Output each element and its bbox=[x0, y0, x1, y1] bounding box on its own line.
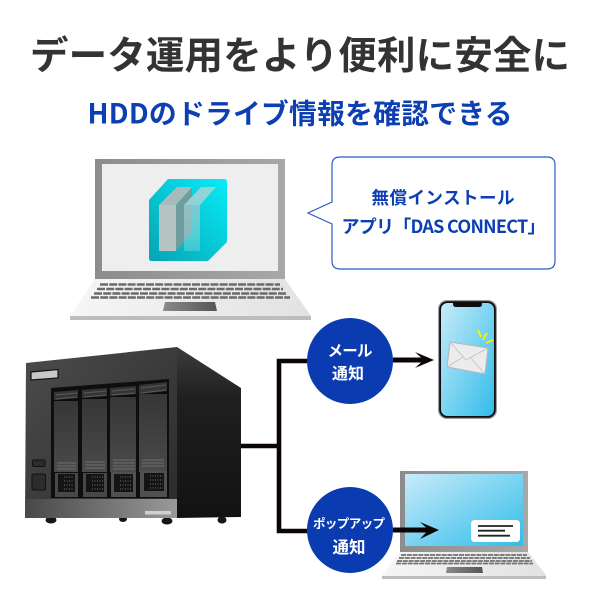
small laptop keyboard bbox=[396, 555, 533, 564]
subtitle: HDDのドライブ情報を確認できる bbox=[88, 92, 512, 132]
notification label: 通知 bbox=[332, 534, 366, 558]
arrow to phone bbox=[393, 352, 434, 368]
callout text line 1: 無償インストール bbox=[372, 185, 514, 210]
notification card bbox=[471, 520, 520, 542]
drive trays bbox=[54, 382, 167, 497]
arrow to small laptop bbox=[393, 522, 439, 539]
small laptop screen bbox=[405, 474, 523, 546]
mail label: メール bbox=[328, 339, 373, 361]
title: データ運用をより便利に安全に bbox=[30, 25, 570, 81]
NAS side panel bbox=[177, 347, 241, 518]
tray handles bbox=[56, 385, 166, 399]
NAS bottom band bbox=[25, 499, 177, 518]
popup label: ポップアップ bbox=[313, 513, 385, 532]
speech bubble callout bbox=[308, 157, 555, 269]
laptop keyboard bbox=[91, 284, 290, 298]
laptop screen bbox=[102, 164, 278, 271]
connector lines bbox=[241, 361, 358, 531]
yellow sparkle bbox=[478, 330, 493, 343]
tray vents bbox=[57, 460, 164, 469]
tray grills bbox=[55, 471, 167, 497]
laptop with app logo bbox=[70, 159, 311, 320]
app logo bbox=[149, 179, 227, 261]
NAS brand label bbox=[31, 370, 58, 380]
small laptop bbox=[382, 471, 546, 579]
small laptop deck bbox=[382, 552, 546, 578]
smartphone bbox=[438, 300, 497, 419]
callout text line 2: アプリ「DAS CONNECT」 bbox=[342, 213, 546, 239]
laptop touchpad bbox=[163, 302, 217, 311]
laptop lid bbox=[95, 159, 285, 279]
small laptop lid bbox=[400, 471, 528, 552]
mail notification circle bbox=[307, 318, 393, 404]
NAS buttons bbox=[32, 460, 46, 490]
small laptop touchpad bbox=[446, 567, 483, 573]
notification label: 通知 bbox=[332, 360, 364, 384]
popup notification circle bbox=[307, 487, 393, 573]
NAS front panel bbox=[25, 347, 177, 518]
phone screen bbox=[441, 303, 494, 416]
NAS device bbox=[25, 347, 241, 524]
NAS band logo bbox=[145, 511, 171, 514]
envelope icon bbox=[447, 342, 488, 374]
NAS feet bbox=[46, 516, 226, 524]
NAS drive bay frame bbox=[51, 379, 169, 498]
laptop deck bbox=[70, 279, 311, 320]
phone notch bbox=[453, 302, 482, 307]
